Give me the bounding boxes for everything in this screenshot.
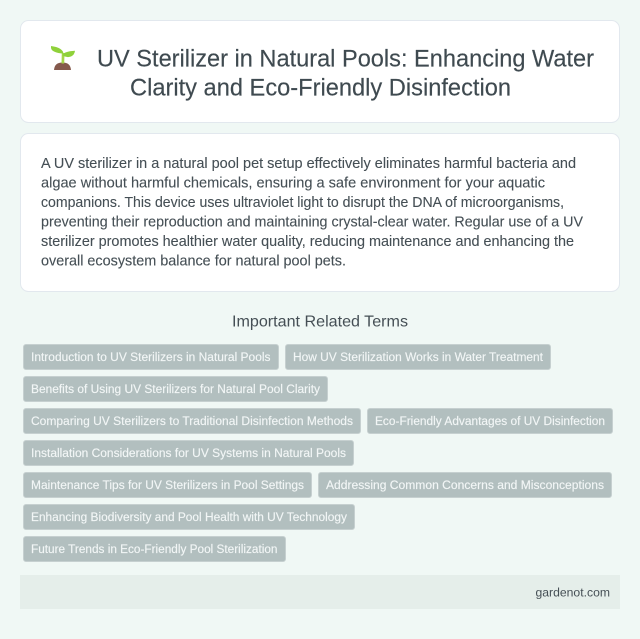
footer — [20, 575, 620, 609]
text block: description: A UV sterilizer in a natural pool pet setup effectively eliminates harmful bacteria and — [41, 156, 576, 172]
tag: installation: Installation Considerations for UV Systems in Natural Pools — [31, 446, 346, 460]
tag: installation — [24, 440, 354, 466]
tag: concerns: Addressing Common Concerns and Misconceptions — [326, 478, 604, 492]
icon: seedling — [51, 46, 75, 70]
tag: maintenance: Maintenance Tips for UV Sterilizers in Pool Settings — [31, 478, 304, 492]
tag: concerns — [318, 472, 612, 498]
title — [97, 46, 594, 102]
tag: comparing — [24, 408, 360, 434]
text block: description: preventing their reproduction and maintaining crystal-clear water. Regular use of a UV — [41, 214, 583, 230]
text block: description: sterilizer promotes healthier water quality, reducing maintenance and enhancing the — [41, 234, 574, 250]
tag: eco-friendly — [368, 408, 612, 434]
tag: future trends — [24, 536, 286, 562]
text block: description: companions. This device uses ultraviolet light to disrupt the DNA of microorganisms, — [41, 195, 564, 211]
tag: benefits — [24, 376, 328, 402]
text block: description — [41, 156, 583, 270]
related term tags — [24, 344, 612, 562]
tag: benefits: Benefits of Using UV Sterilizers for Natural Pool Clarity — [31, 382, 321, 396]
tag: future trends: Future Trends in Eco-Friendly Pool Sterilization — [31, 542, 278, 556]
heading: related terms: Important Related Terms — [232, 314, 408, 330]
tag: how it works: How UV Sterilization Works in Water Treatment — [293, 350, 544, 364]
panel: description — [20, 134, 620, 292]
tag: biodiversity: Enhancing Biodiversity and Pool Health with UV Technology — [31, 510, 348, 524]
tag: introduction: Introduction to UV Sterilizers in Natural Pools — [31, 350, 270, 364]
tag: how it works — [286, 344, 550, 370]
tag: maintenance — [24, 472, 312, 498]
panel: header — [20, 20, 620, 122]
tag: biodiversity — [24, 504, 354, 530]
text block: description: overall ecosystem balance for natural pool pets. — [41, 254, 346, 270]
title: Clarity and Eco-Friendly Disinfection — [130, 74, 511, 102]
text block: description: algae without harmful chemicals, ensuring a safe environment for your aquatic — [41, 176, 545, 192]
tag: introduction — [24, 344, 278, 370]
footer source: gardenot.com — [536, 586, 610, 600]
title: UV Sterilizer in Natural Pools: Enhancing Water — [97, 46, 594, 72]
tag: eco-friendly: Eco-Friendly Advantages of UV Disinfection — [375, 414, 605, 428]
tag: comparing: Comparing UV Sterilizers to Traditional Disinfection Methods — [31, 414, 353, 428]
